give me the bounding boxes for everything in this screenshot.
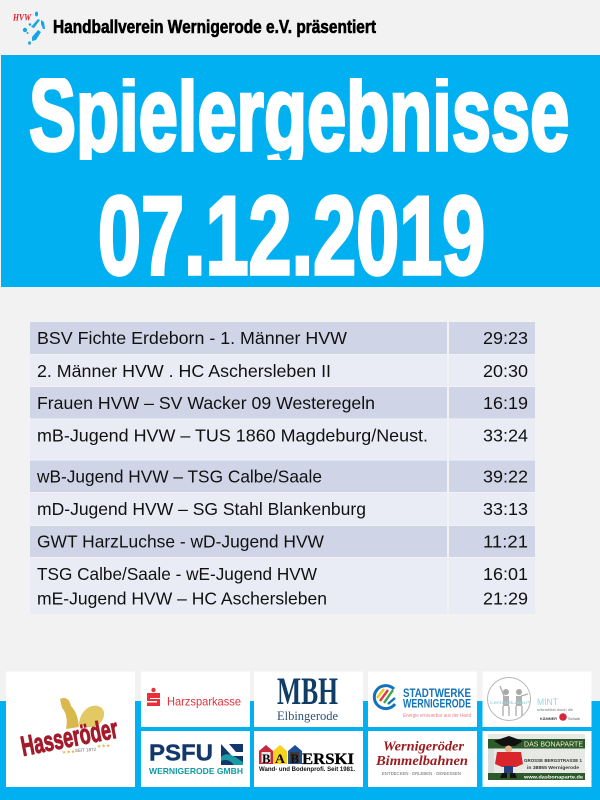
- row 4: [30, 420, 535, 460]
- row 2: 20:30: [483, 361, 528, 381]
- logo: Das Bonaparte: in 38855 Wernigerode: [527, 765, 580, 770]
- row 2: 2. Männer HVW . HC Aschersleben II: [37, 361, 331, 381]
- logo: MBH: Elbingerode: [277, 708, 338, 723]
- logo: Baberski: Wand- und Bodenprofi. Seit 1981.: [259, 766, 355, 773]
- logo: Hasseröder: SEIT 1872: [75, 747, 97, 753]
- logo: MINT: Schule: [568, 716, 581, 721]
- row 6: [30, 493, 535, 525]
- logo: Baberski: B: [262, 751, 271, 766]
- logo: Stadtwerke Wernigerode: WERNIGERODE: [403, 698, 471, 710]
- logo: Baberski: B: [290, 751, 299, 766]
- row 5: wB-Jugend HVW – TSG Calbe/Saale: [36, 466, 322, 486]
- logo: Wernigeröder Bimmelbahnen: ENTDECKEN · ERLEBEN · GENIESSEN: [382, 771, 461, 776]
- icon: club logo: HVW: [12, 12, 32, 22]
- row 5: 39:22: [483, 466, 528, 486]
- row 6: mD-Jugend HVW – SG Stahl Blankenburg: [37, 499, 366, 519]
- row 7: 11:21: [483, 532, 528, 552]
- row 8: TSG Calbe/Saale - wE-Jugend HVW: [37, 564, 317, 584]
- icon: club logo: [12, 12, 45, 45]
- logo: MINT: KÄMMER: [540, 716, 557, 721]
- header bar: [12, 12, 376, 45]
- date: 07.12.2019: [98, 174, 485, 298]
- logo: MINT: LernortLabor*: [490, 700, 530, 705]
- logo: Stadtwerke Wernigerode: Energie erneuerbar aus der Hand: [403, 713, 471, 719]
- logo: Hasseröder: Hasseröder: [18, 713, 120, 762]
- logo: MINT: MINT: [537, 697, 558, 708]
- row 2: [30, 355, 535, 386]
- logo: Baberski: [254, 731, 363, 787]
- header text: Handballverein Wernigerode e.V. präsentiert: [53, 17, 376, 37]
- row 8: 16:01: [483, 564, 528, 584]
- logo: Hasseröder: ★★★: [62, 749, 76, 756]
- row 4: mB-Jugend HVW – TUS 1860 Magdeburg/Neust.: [37, 426, 428, 446]
- row 8: 21:29: [483, 588, 528, 608]
- logo: MBH: [254, 671, 363, 727]
- logo: MINT: unterstützt durch die: [537, 708, 573, 712]
- logo: PSFU: [141, 731, 250, 787]
- row 5: [30, 460, 535, 492]
- logo: MINT: [482, 672, 592, 727]
- results table: [30, 322, 535, 614]
- logo: Harzsparkasse: [141, 672, 250, 727]
- row 8: [30, 558, 535, 614]
- logo: Das Bonaparte: [482, 731, 592, 787]
- logo: Das Bonaparte: GROSSE BERGSTRASSE 1: [524, 758, 582, 763]
- row 6: 33:13: [483, 499, 528, 519]
- title panel: [1, 55, 600, 298]
- logo: MBH: MBH: [277, 671, 338, 713]
- sponsor band: [0, 671, 600, 800]
- logo: Hasseröder: [6, 672, 135, 787]
- logo: Wernigeröder Bimmelbahnen: [368, 731, 477, 787]
- logo: Hasseröder: ★★★: [97, 743, 111, 750]
- row 7: [30, 526, 535, 557]
- row 1: [30, 322, 535, 354]
- logo: Harzsparkasse: Harzsparkasse: [167, 694, 241, 708]
- row 7: GWT HarzLuchse - wD-Jugend HVW: [37, 532, 324, 552]
- logo: Wernigeröder Bimmelbahnen: Wernigeröder: [383, 740, 465, 754]
- row 3: Frauen HVW – SV Wacker 09 Westeregeln: [37, 393, 375, 413]
- row 3: [30, 387, 535, 418]
- row 3: 16:19: [483, 393, 528, 413]
- logo: Baberski: A: [275, 751, 286, 766]
- logo: Stadtwerke Wernigerode: STADTWERKE: [403, 688, 471, 700]
- logo: Stadtwerke Wernigerode: [368, 672, 477, 727]
- logo: Das Bonaparte: www.dasbonaparte.de: [523, 774, 583, 780]
- title: Spielergebnisse: [29, 55, 569, 172]
- logo: Das Bonaparte: DAS BONAPARTE: [524, 740, 583, 748]
- row 8: mE-Jugend HVW – HC Aschersleben: [37, 588, 327, 608]
- logo: Wernigeröder Bimmelbahnen: Bimmelbahnen: [375, 754, 468, 769]
- row 1: BSV Fichte Erdeborn - 1. Männer HVW: [37, 328, 347, 348]
- logo: PSFU: PSFU: [149, 740, 213, 766]
- logo: Baberski: ERSKI: [302, 751, 354, 768]
- row 1: 29:23: [483, 328, 528, 348]
- row 4: 33:24: [483, 426, 528, 446]
- logo: PSFU: WERNIGERODE GMBH: [149, 766, 243, 776]
